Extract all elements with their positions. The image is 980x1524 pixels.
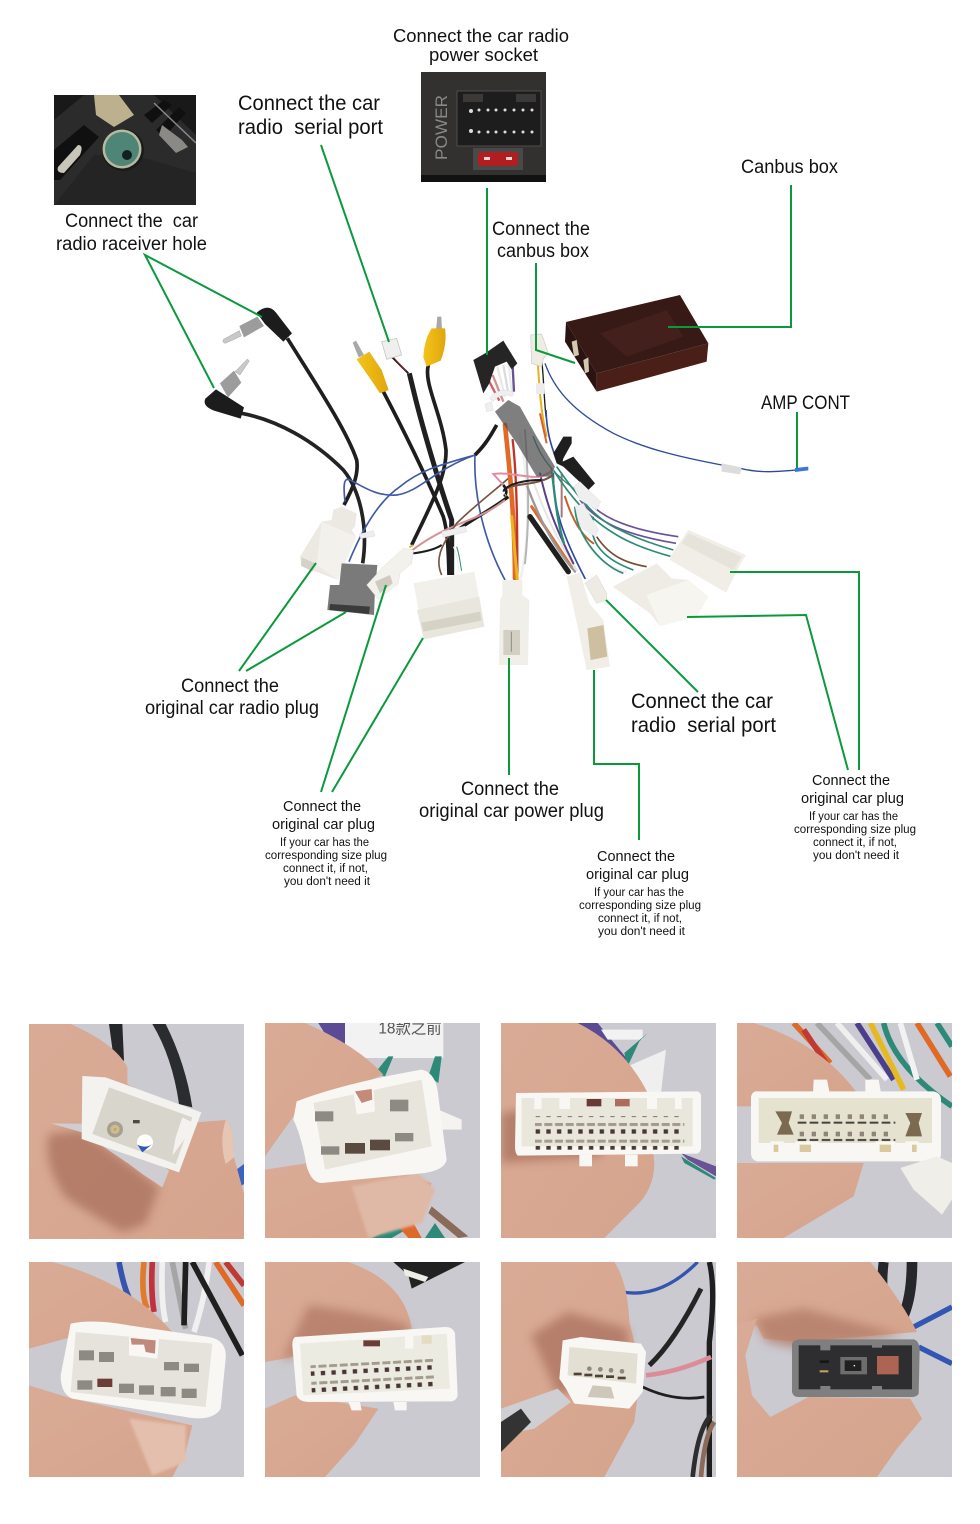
label: original car plug left (265, 798, 387, 888)
white plug narrow (567, 573, 610, 670)
label: original car plug left: original car plug (272, 816, 375, 833)
label: original car plug middle (579, 848, 701, 938)
white plug wide (414, 572, 484, 639)
label: original car power plug (419, 779, 604, 822)
label: car radio serial port top: radio serial port (238, 116, 383, 139)
label: original car power plug: Connect the (461, 779, 559, 800)
cable: antenna lead lower (242, 413, 364, 563)
photo tile: six-pin white plug (265, 1020, 480, 1238)
photo: car radio receiver hole (54, 95, 196, 205)
photo: car radio power socket: POWER (432, 95, 451, 160)
canbus box (565, 295, 708, 392)
label: car radio receiver hole (56, 211, 207, 255)
small serial connector (382, 338, 402, 359)
harness cable tie (485, 390, 514, 412)
label: original car plug left: connect it, if not, (283, 863, 368, 875)
jumper wires (409, 425, 508, 575)
photo tile: gray plug (737, 1262, 952, 1477)
label: original car plug left: corresponding size plug (265, 850, 387, 862)
label: original car plug right: Connect the (812, 772, 890, 789)
label: original car plug middle: corresponding size plug (579, 900, 701, 912)
main wire bundle (505, 425, 593, 579)
label: car radio serial port top (238, 92, 383, 139)
black inline connector (553, 437, 595, 490)
label: car radio receiver hole: radio raceiver hole (56, 234, 207, 255)
small white plug (367, 548, 413, 599)
label: original car plug left: you don't need it (284, 876, 371, 888)
RCA plug right (423, 317, 446, 367)
label: car radio receiver hole: Connect the car (65, 211, 199, 232)
label: car radio serial port top: Connect the car (238, 92, 380, 115)
label: canbus box: Canbus box (741, 157, 838, 178)
white plug lower right (613, 563, 708, 626)
label: original car plug right: you don't need it (813, 850, 900, 862)
wires to right plugs (553, 467, 678, 573)
small white serial plug (585, 575, 607, 603)
label: original car power plug: original car power plug (419, 801, 604, 822)
photo: car radio power socket (421, 72, 546, 182)
label: original car plug right: corresponding size plug (794, 824, 916, 836)
photo tile: white plug front (501, 1023, 716, 1238)
label: AMP CONT: AMP CONT (761, 393, 850, 414)
label: original car plug right: If your car has the (809, 811, 898, 823)
leader lines (145, 145, 859, 840)
gray label wrap (495, 400, 555, 477)
wires from harness plug (487, 364, 514, 402)
label: car radio serial port lower (631, 690, 776, 737)
cable: antenna lead upper (287, 338, 357, 505)
label: original car plug middle: If your car has the (594, 887, 684, 899)
RCA plug left (353, 341, 389, 393)
gray radio plug (327, 563, 377, 615)
photo tile: six-pin white plug: 18款之前 (378, 1020, 442, 1038)
label: original car plug middle: Connect the (597, 848, 675, 865)
photo tile: radio plug with antenna socket (29, 1024, 244, 1239)
canbus lead wires (537, 353, 557, 460)
antenna plug lower (205, 359, 249, 419)
photo tile: white plug back (737, 1023, 952, 1238)
label: original car plug right: connect it, if not, (813, 837, 897, 849)
label: car radio power socket (393, 25, 569, 65)
label: connect the canbus box: Connect the (492, 219, 590, 240)
label: car radio serial port lower: Connect the car (631, 690, 773, 713)
harness photo: cables and connectors (205, 295, 808, 670)
label: connect the canbus box: canbus box (497, 241, 589, 262)
white plug right (670, 530, 746, 593)
label: original car plug left: If your car has the (280, 837, 369, 849)
cable: RCA left (383, 392, 449, 575)
photo tile: twelve-pin white plug (29, 1262, 244, 1477)
label: original car plug middle: you don't need it (598, 926, 686, 938)
label: original car plug left: Connect the (283, 798, 361, 815)
antenna plug upper (223, 308, 292, 343)
cable ties lower left (359, 526, 467, 539)
canbus small connector (531, 334, 548, 394)
label: original car radio plug (145, 676, 319, 719)
white power plug (499, 580, 529, 665)
label: connect the canbus box (492, 219, 590, 262)
white radio plug (300, 507, 357, 580)
label: car radio serial port lower: radio serial port (631, 714, 776, 737)
label: car radio power socket: power socket (429, 44, 538, 65)
amp wire and tip (545, 363, 808, 474)
label: car radio power socket: Connect the car radio (393, 25, 569, 46)
label: original car plug right (794, 772, 916, 862)
label: original car plug right: original car plug (801, 790, 904, 807)
pink and brown loop (493, 470, 553, 495)
label: original car radio plug: Connect the (181, 676, 279, 697)
cable: RCA right (412, 365, 446, 545)
blue wires left (344, 455, 505, 580)
label: original car plug middle: connect it, if not, (598, 913, 682, 925)
photo tile: small four-pin plug (501, 1262, 716, 1477)
label: original car plug middle: original car plug (586, 866, 689, 883)
label: original car radio plug: original car radio plug (145, 698, 319, 719)
black harness connector (473, 341, 517, 393)
white wire labels (573, 482, 601, 510)
photo tile: white plug pins (265, 1262, 480, 1477)
cable: serial port lead (392, 357, 452, 575)
right half of harness (473, 334, 808, 670)
